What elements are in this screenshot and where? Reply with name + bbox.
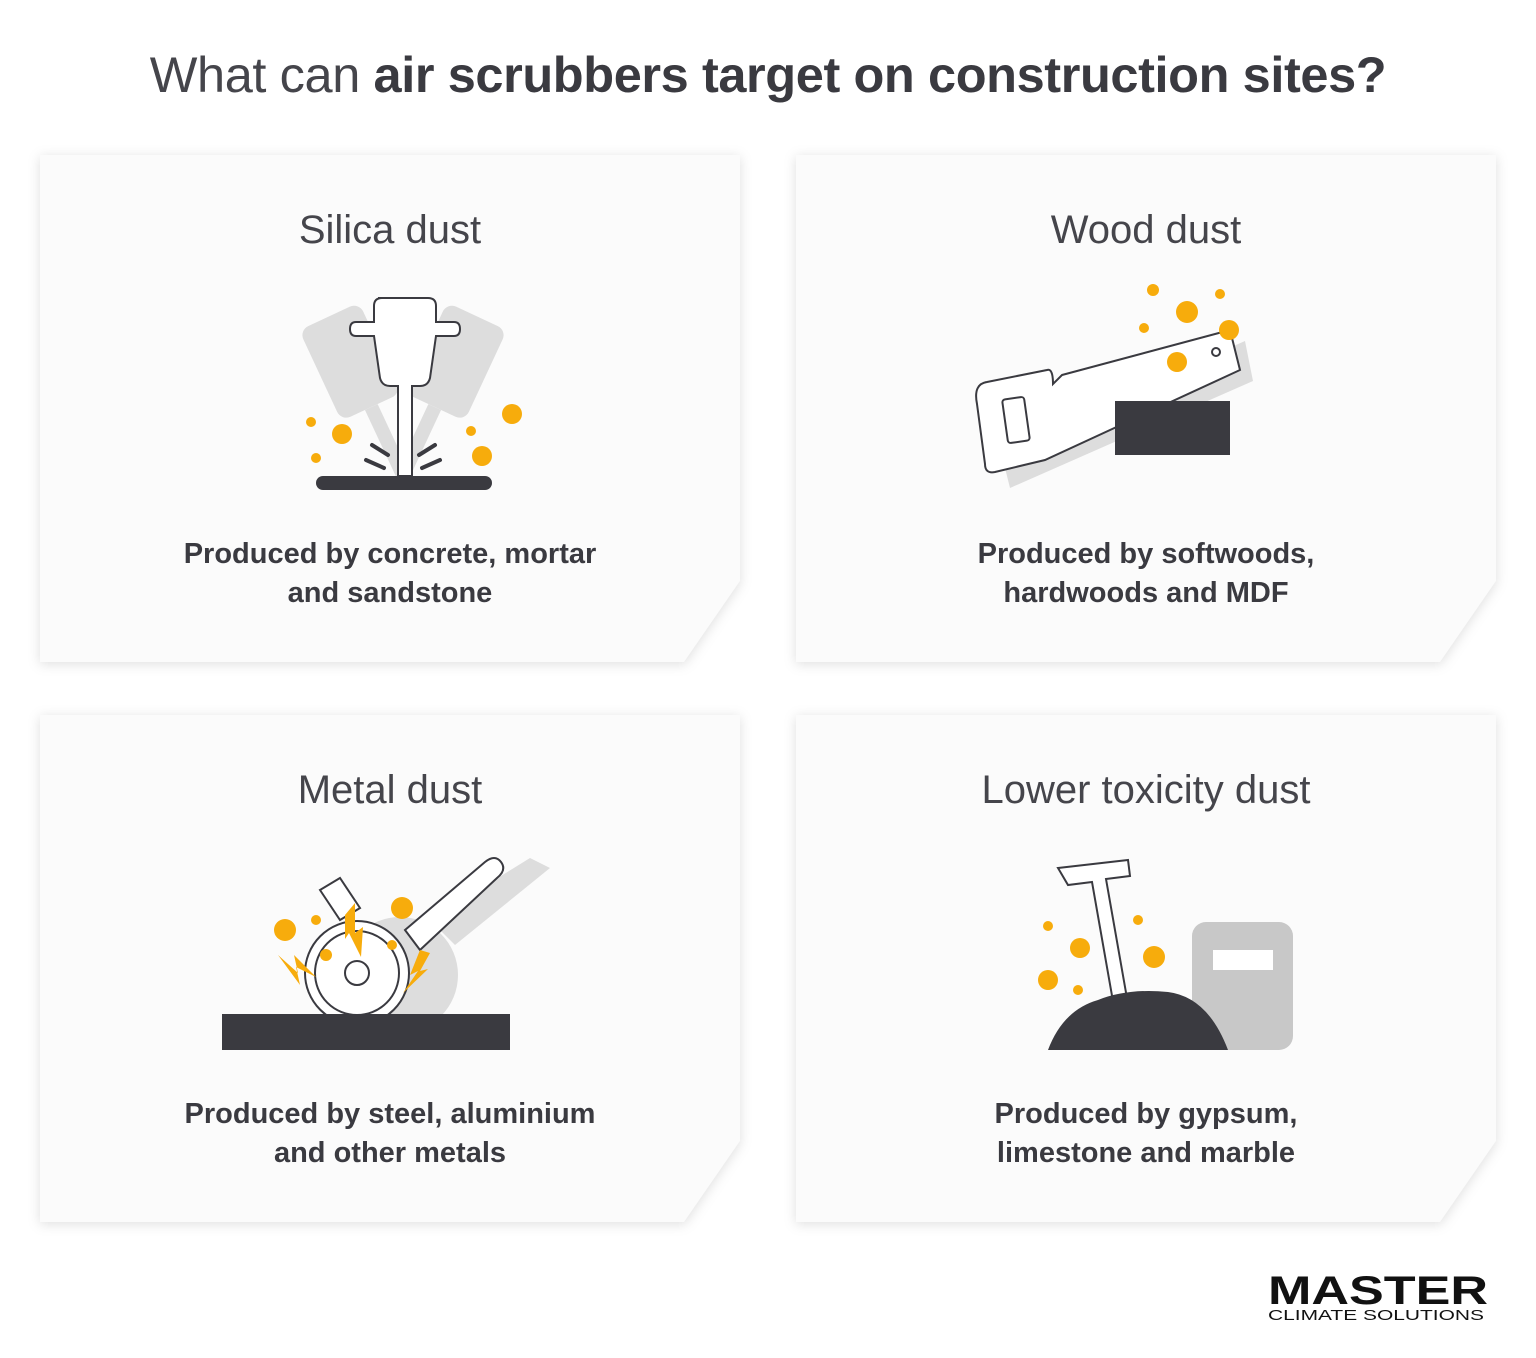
text: wood	[978, 538, 1314, 609]
text: silica: Produced by concrete, mortar	[184, 538, 596, 570]
heading: lower toxicity: Lower toxicity dust	[981, 768, 1311, 812]
title: What can air scrubbers target on construction sites?	[150, 46, 1386, 103]
icon: angle grinder	[222, 858, 550, 1050]
heading: wood: Wood dust	[1051, 208, 1241, 252]
logo	[1268, 1269, 1488, 1324]
text: wood: Produced by softwoods,	[978, 538, 1314, 570]
panel: metal dust	[36, 713, 744, 1228]
panel: lower toxicity dust	[792, 713, 1500, 1228]
text: lower toxicity: limestone and marble	[997, 1137, 1295, 1169]
heading: silica: Silica dust	[299, 208, 481, 252]
logo: CLIMATE SOLUTIONS	[1268, 1307, 1484, 1324]
text: silica: and sandstone	[288, 577, 492, 609]
logo: MASTER	[1268, 1269, 1488, 1313]
icon: shovel and sack	[1038, 860, 1293, 1050]
text: metal: Produced by steel, aluminium	[185, 1098, 595, 1130]
heading: metal: Metal dust	[298, 768, 482, 812]
text: metal	[185, 1098, 595, 1169]
icon: hand saw	[976, 284, 1253, 488]
text: wood: hardwoods and MDF	[1003, 577, 1289, 609]
text: silica	[184, 538, 596, 609]
text: lower toxicity: Produced by gypsum,	[995, 1098, 1297, 1130]
text: metal: and other metals	[274, 1137, 506, 1169]
icon: jackhammer	[299, 298, 522, 490]
panel: wood dust	[792, 153, 1500, 668]
text: lower toxicity	[995, 1098, 1297, 1169]
panel: silica dust	[36, 153, 744, 668]
